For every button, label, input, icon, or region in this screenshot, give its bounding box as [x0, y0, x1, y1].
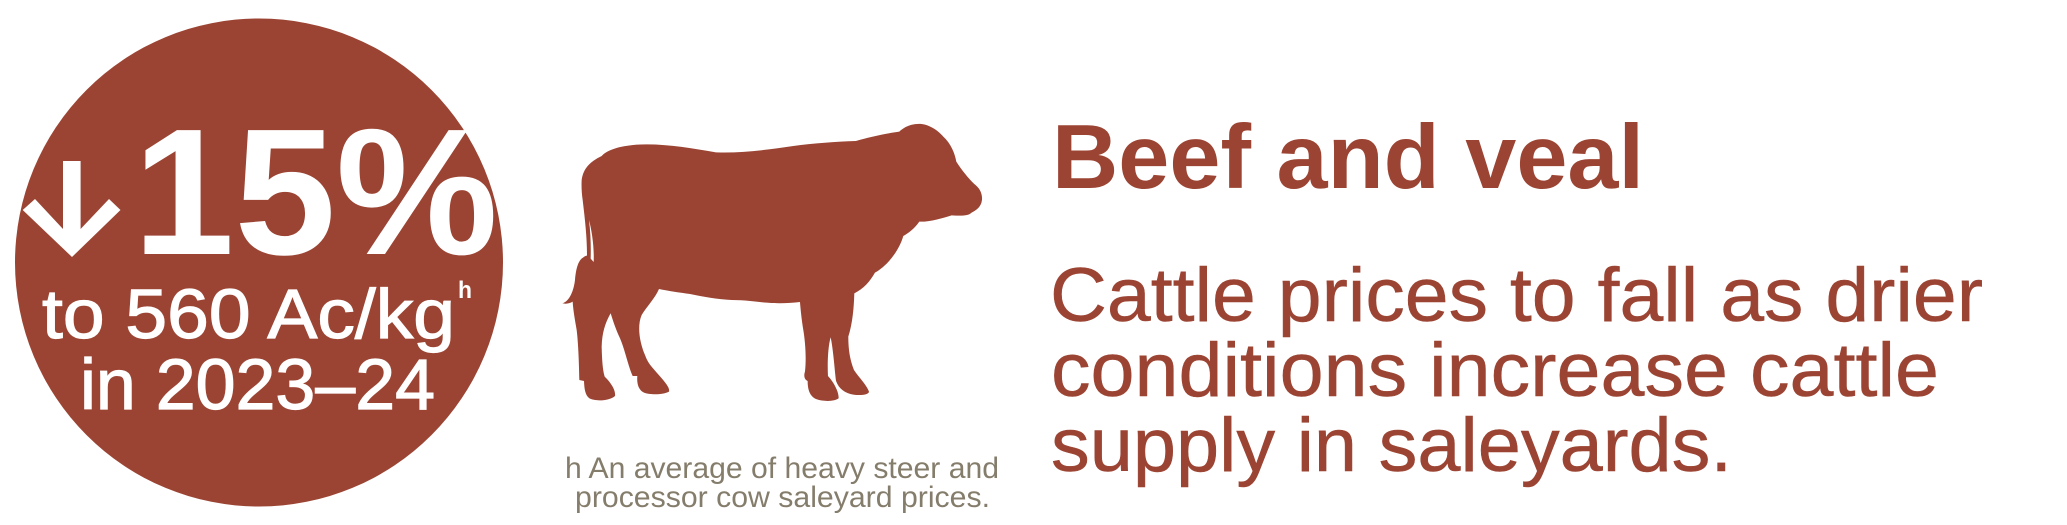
- price label: to 560 Ac/kg: [42, 275, 455, 353]
- footnote: [565, 452, 999, 514]
- circle background: [15, 18, 503, 506]
- text block: outlook description: Cattle prices to fall as drier: [1050, 253, 1983, 338]
- footnote: h An average of heavy steer and: [565, 452, 999, 485]
- heading: Beef and veal: [1052, 107, 1644, 208]
- icon: down arrow: [23, 161, 121, 257]
- panel: price change circle: [15, 18, 503, 506]
- footnote marker: h: [458, 277, 472, 304]
- text block: outlook description: [1050, 253, 1983, 488]
- text block: outlook description: supply in saleyards.: [1051, 403, 1732, 488]
- headline figure: 15%: [133, 92, 498, 293]
- icon: cattle silhouette: [562, 124, 982, 401]
- text block: outlook description: conditions increase cattle: [1051, 328, 1939, 413]
- footnote: processor cow saleyard prices.: [575, 481, 990, 514]
- period label: in 2023–24: [80, 346, 435, 425]
